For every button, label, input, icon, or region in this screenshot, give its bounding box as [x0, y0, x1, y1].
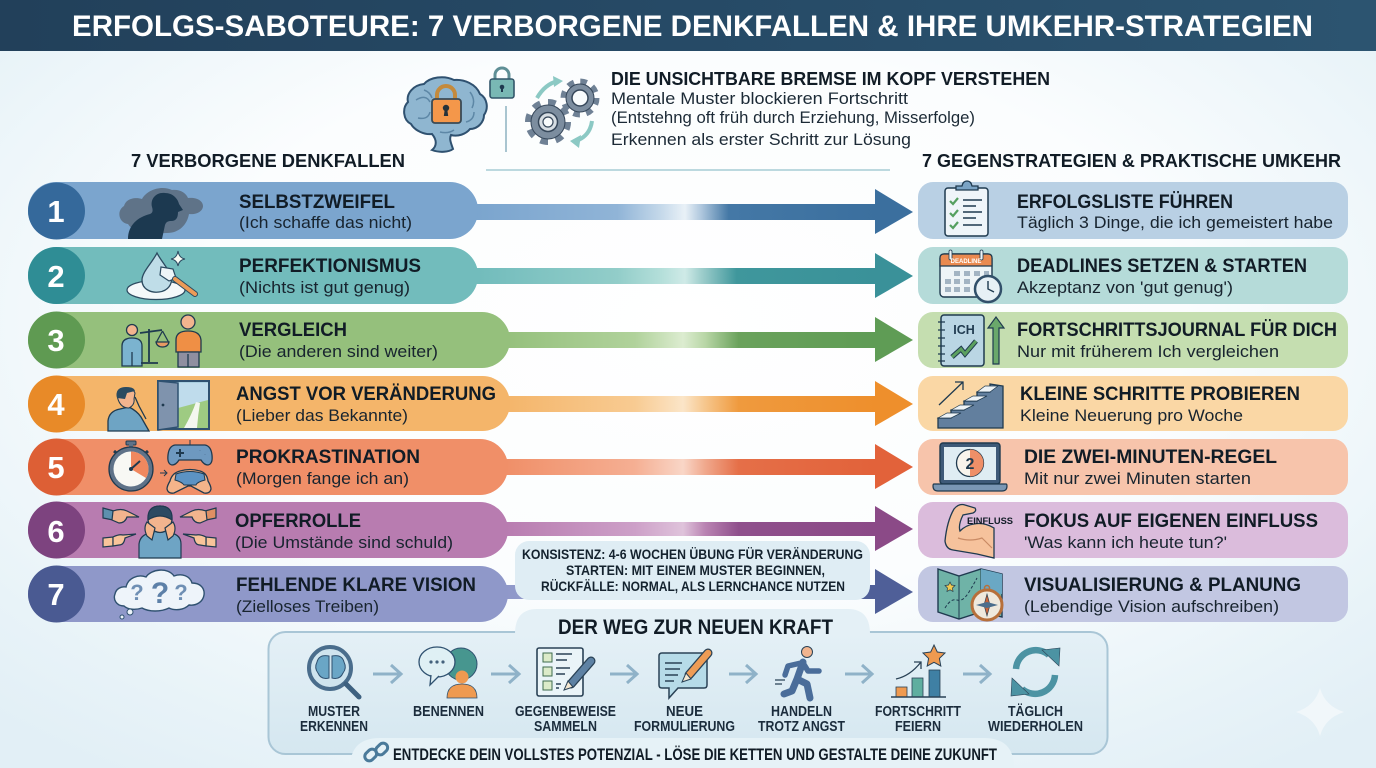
callout: closing message: ENTDECKE DEIN VOLLSTES POTENZIAL - LÖSE DIE KETTEN UND GESTALTE DEINE ZUKUNFT	[393, 745, 997, 764]
step 6: celebrate progress: FEIERN	[895, 719, 941, 735]
icon: calendar with clock: DEADLINE	[951, 259, 981, 265]
icon: person before open door	[108, 381, 209, 431]
arrow: row 3	[500, 317, 913, 362]
step 4: new wording: FORMULIERUNG	[634, 719, 735, 735]
step 6: celebrate progress	[875, 645, 961, 735]
text: trap 6	[235, 510, 453, 552]
callout: consistency note: STARTEN: MIT EINEM MUSTER BEGINNEN,	[566, 562, 825, 578]
panel: trap 1	[28, 182, 478, 240]
arrow: row 5	[500, 444, 913, 489]
icon: thought cloud with question marks: ?	[151, 577, 169, 610]
text: strategy 6: FOKUS AUF EIGENEN EINFLUSS	[1024, 510, 1318, 532]
icon: chain links	[363, 741, 389, 763]
step 3: gather counter-evidence	[515, 648, 616, 735]
text: strategy 1: Täglich 3 Dinge, die ich gemeistert habe	[1017, 214, 1333, 232]
icon: comparison figures with scale	[122, 315, 201, 367]
step 5: act despite fear	[758, 646, 845, 735]
icon: sparkle watermark	[1296, 688, 1344, 736]
text: trap 2	[239, 255, 421, 297]
icon: laptop with two-minute timer	[933, 443, 1007, 491]
panel: strategy 3	[918, 312, 1348, 368]
icon: brain with padlock	[404, 77, 487, 152]
icon: flexed biceps labelled Einfluss	[945, 504, 1013, 558]
text: strategy 3	[1017, 318, 1337, 361]
step 1: recognise pattern: MUSTER	[308, 704, 360, 720]
text: trap 4	[236, 382, 496, 425]
arrow: row 4	[500, 381, 913, 426]
icon: calendar with clock	[940, 250, 1001, 302]
text: trap 1	[239, 191, 412, 232]
icon: journal with rising arrow: ICH	[953, 323, 975, 337]
text: strategy 2	[1017, 255, 1307, 297]
intro text block: DIE UNSICHTBARE BREMSE IM KOPF VERSTEHEN	[611, 68, 1050, 89]
text: strategy 1	[1017, 190, 1333, 232]
intro text block: Erkennen als erster Schritt zur Lösung	[611, 131, 911, 149]
panel: trap 5: 5	[47, 450, 65, 485]
panel: trap 5	[28, 438, 508, 496]
text: strategy 7	[1024, 574, 1301, 616]
text: strategy 4: KLEINE SCHRITTE PROBIEREN	[1020, 383, 1300, 405]
icon: journal with rising arrow	[938, 315, 1004, 366]
text: strategy 1: ERFOLGSLISTE FÜHREN	[1017, 190, 1233, 213]
panel: trap 6: 6	[47, 514, 65, 549]
arrow: step 2 to 3	[491, 665, 519, 683]
text: trap 2: PERFEKTIONISMUS	[239, 255, 421, 277]
icon: water drop on plate with scraper	[127, 251, 195, 300]
panel: trap 7: 7	[47, 577, 65, 612]
title banner	[0, 0, 1376, 51]
arrow: row 1	[470, 189, 913, 234]
text: trap 5: (Morgen fange ich an)	[236, 470, 409, 488]
text: strategy 4	[1020, 383, 1300, 425]
text: strategy 5: Mit nur zwei Minuten starten	[1024, 470, 1251, 488]
callout: consistency note: KONSISTENZ: 4-6 WOCHEN ÜBUNG FÜR VERÄNDERUNG	[522, 546, 863, 562]
text: strategy 7: (Lebendige Vision aufschreiben)	[1024, 598, 1279, 616]
panel: trap 6	[28, 502, 508, 558]
step 4: new wording	[634, 653, 735, 735]
panel: trap 2: 2	[47, 259, 65, 294]
arrow: step 6 to 7	[963, 665, 990, 683]
text: trap 5	[236, 446, 420, 488]
step 3: gather counter-evidence: GEGENBEWEISE	[515, 704, 616, 720]
icon: thought cloud with question marks: ?	[130, 580, 144, 605]
text: strategy 6: 'Was kann ich heute tun?'	[1024, 534, 1227, 552]
text: strategy 7: VISUALISIERUNG & PLANUNG	[1024, 574, 1301, 596]
arrow: row 6	[500, 506, 913, 551]
step 6: celebrate progress: FORTSCHRITT	[875, 704, 961, 720]
text: strategy 6	[1024, 510, 1318, 552]
icon: laptop with two-minute timer: 2	[966, 456, 975, 473]
text: trap 2: (Nichts ist gut genug)	[239, 279, 410, 297]
icon: thought cloud with question marks: ?	[174, 580, 188, 605]
text: trap 7	[236, 574, 476, 616]
panel: trap 3: 3	[47, 323, 65, 358]
text: trap 1: SELBSTZWEIFEL	[239, 191, 395, 213]
step 7: repeat daily	[988, 648, 1083, 735]
text: trap 4: ANGST VOR VERÄNDERUNG	[236, 382, 496, 405]
text: strategy 5	[1024, 446, 1277, 488]
step 1: recognise pattern	[300, 647, 368, 735]
heading: right column: 7 GEGENSTRATEGIEN & PRAKTISCHE UMKEHR	[922, 150, 1341, 171]
step 5: act despite fear: TROTZ ANGST	[758, 719, 845, 735]
panel: strategy 4	[918, 376, 1348, 431]
intro text block	[611, 68, 1050, 149]
step 7: repeat daily: WIEDERHOLEN	[988, 719, 1083, 735]
text: strategy 2: DEADLINES SETZEN & STARTEN	[1017, 255, 1307, 277]
callout: closing message	[350, 738, 1014, 768]
step 3: gather counter-evidence: SAMMELN	[534, 719, 597, 735]
intro text block: Mentale Muster blockieren Fortschritt	[611, 90, 908, 108]
icon: stairs with arrow	[938, 382, 1003, 428]
step 7: repeat daily: TÄGLICH	[1008, 703, 1063, 720]
step 5: act despite fear: HANDELN	[771, 704, 832, 720]
arrow: step 3 to 4	[610, 665, 637, 683]
text: trap 7: (Zielloses Treiben)	[236, 598, 379, 616]
heading: left column: 7 VERBORGENE DENKFALLEN	[131, 150, 405, 171]
icon: stopwatch and game controllers	[109, 440, 212, 493]
panel: trap 2	[28, 247, 478, 304]
text: trap 3: VERGLEICH	[239, 319, 347, 341]
panel: trap 4: 4	[47, 387, 65, 422]
icon: flexed biceps labelled Einfluss: EINFLUSS	[967, 516, 1013, 527]
panel: path to new strength	[268, 609, 1108, 754]
text: trap 3: (Die anderen sind weiter)	[239, 343, 438, 361]
icon: person surrounded by pointing hands	[103, 506, 216, 558]
panel: strategy 7	[918, 566, 1348, 622]
text: trap 6: OPFERROLLE	[235, 510, 361, 532]
text: trap 1: (Ich schaffe das nicht)	[239, 214, 412, 232]
arrow: step 4 to 5	[729, 665, 756, 683]
arrow: step 5 to 6	[845, 665, 872, 683]
text: trap 3	[239, 319, 438, 361]
step 1: recognise pattern: ERKENNEN	[300, 719, 368, 735]
icon: clipboard checklist	[945, 181, 988, 236]
text: strategy 3: Nur mit früherem Ich vergleichen	[1017, 343, 1279, 361]
icon: teal padlock	[490, 68, 514, 98]
text: trap 7: FEHLENDE KLARE VISION	[236, 574, 476, 596]
panel: strategy 2	[918, 247, 1348, 304]
text: strategy 3: FORTSCHRITTSJOURNAL FÜR DICH	[1017, 318, 1337, 341]
step 4: new wording: NEUE	[666, 704, 703, 720]
text: strategy 5: DIE ZWEI-MINUTEN-REGEL	[1024, 446, 1277, 468]
text: trap 6: (Die Umstände sind schuld)	[235, 534, 453, 552]
panel: trap 4	[28, 376, 510, 432]
step 2: name it: BENENNEN	[413, 704, 484, 720]
icon: person under dark cloud	[119, 188, 203, 239]
icon: gears with cycle arrows	[529, 76, 596, 148]
callout: consistency note	[515, 541, 870, 600]
icon: thought cloud with question marks	[114, 570, 204, 619]
text: strategy 4: Kleine Neuerung pro Woche	[1020, 407, 1243, 425]
panel: strategy 1	[918, 181, 1348, 239]
intro text block: (Entstehng oft früh durch Erziehung, Misserfolge)	[611, 109, 975, 127]
panel: trap 1: 1	[47, 194, 65, 229]
heading: path: DER WEG ZUR NEUEN KRAFT	[558, 616, 833, 639]
callout: consistency note: RÜCKFÄLLE: NORMAL, ALS LERNCHANCE NUTZEN	[541, 578, 845, 594]
arrow: step 1 to 2	[373, 665, 401, 683]
panel: strategy 5	[918, 439, 1348, 495]
panel: trap 7	[28, 566, 508, 622]
icon: map with compass	[938, 569, 1002, 620]
title banner: ERFOLGS-SABOTEURE: 7 VERBORGENE DENKFALLEN & IHRE UMKEHR-STRATEGIEN	[72, 10, 1313, 43]
arrow: row 2	[470, 253, 913, 298]
panel: strategy 6	[918, 502, 1348, 558]
text: trap 4: (Lieber das Bekannte)	[236, 407, 408, 425]
panel: trap 3	[28, 312, 510, 368]
step 2: name it	[413, 647, 484, 720]
text: trap 5: PROKRASTINATION	[236, 446, 420, 468]
text: strategy 2: Akzeptanz von 'gut genug')	[1017, 279, 1233, 297]
arrow: row 7	[500, 569, 913, 614]
